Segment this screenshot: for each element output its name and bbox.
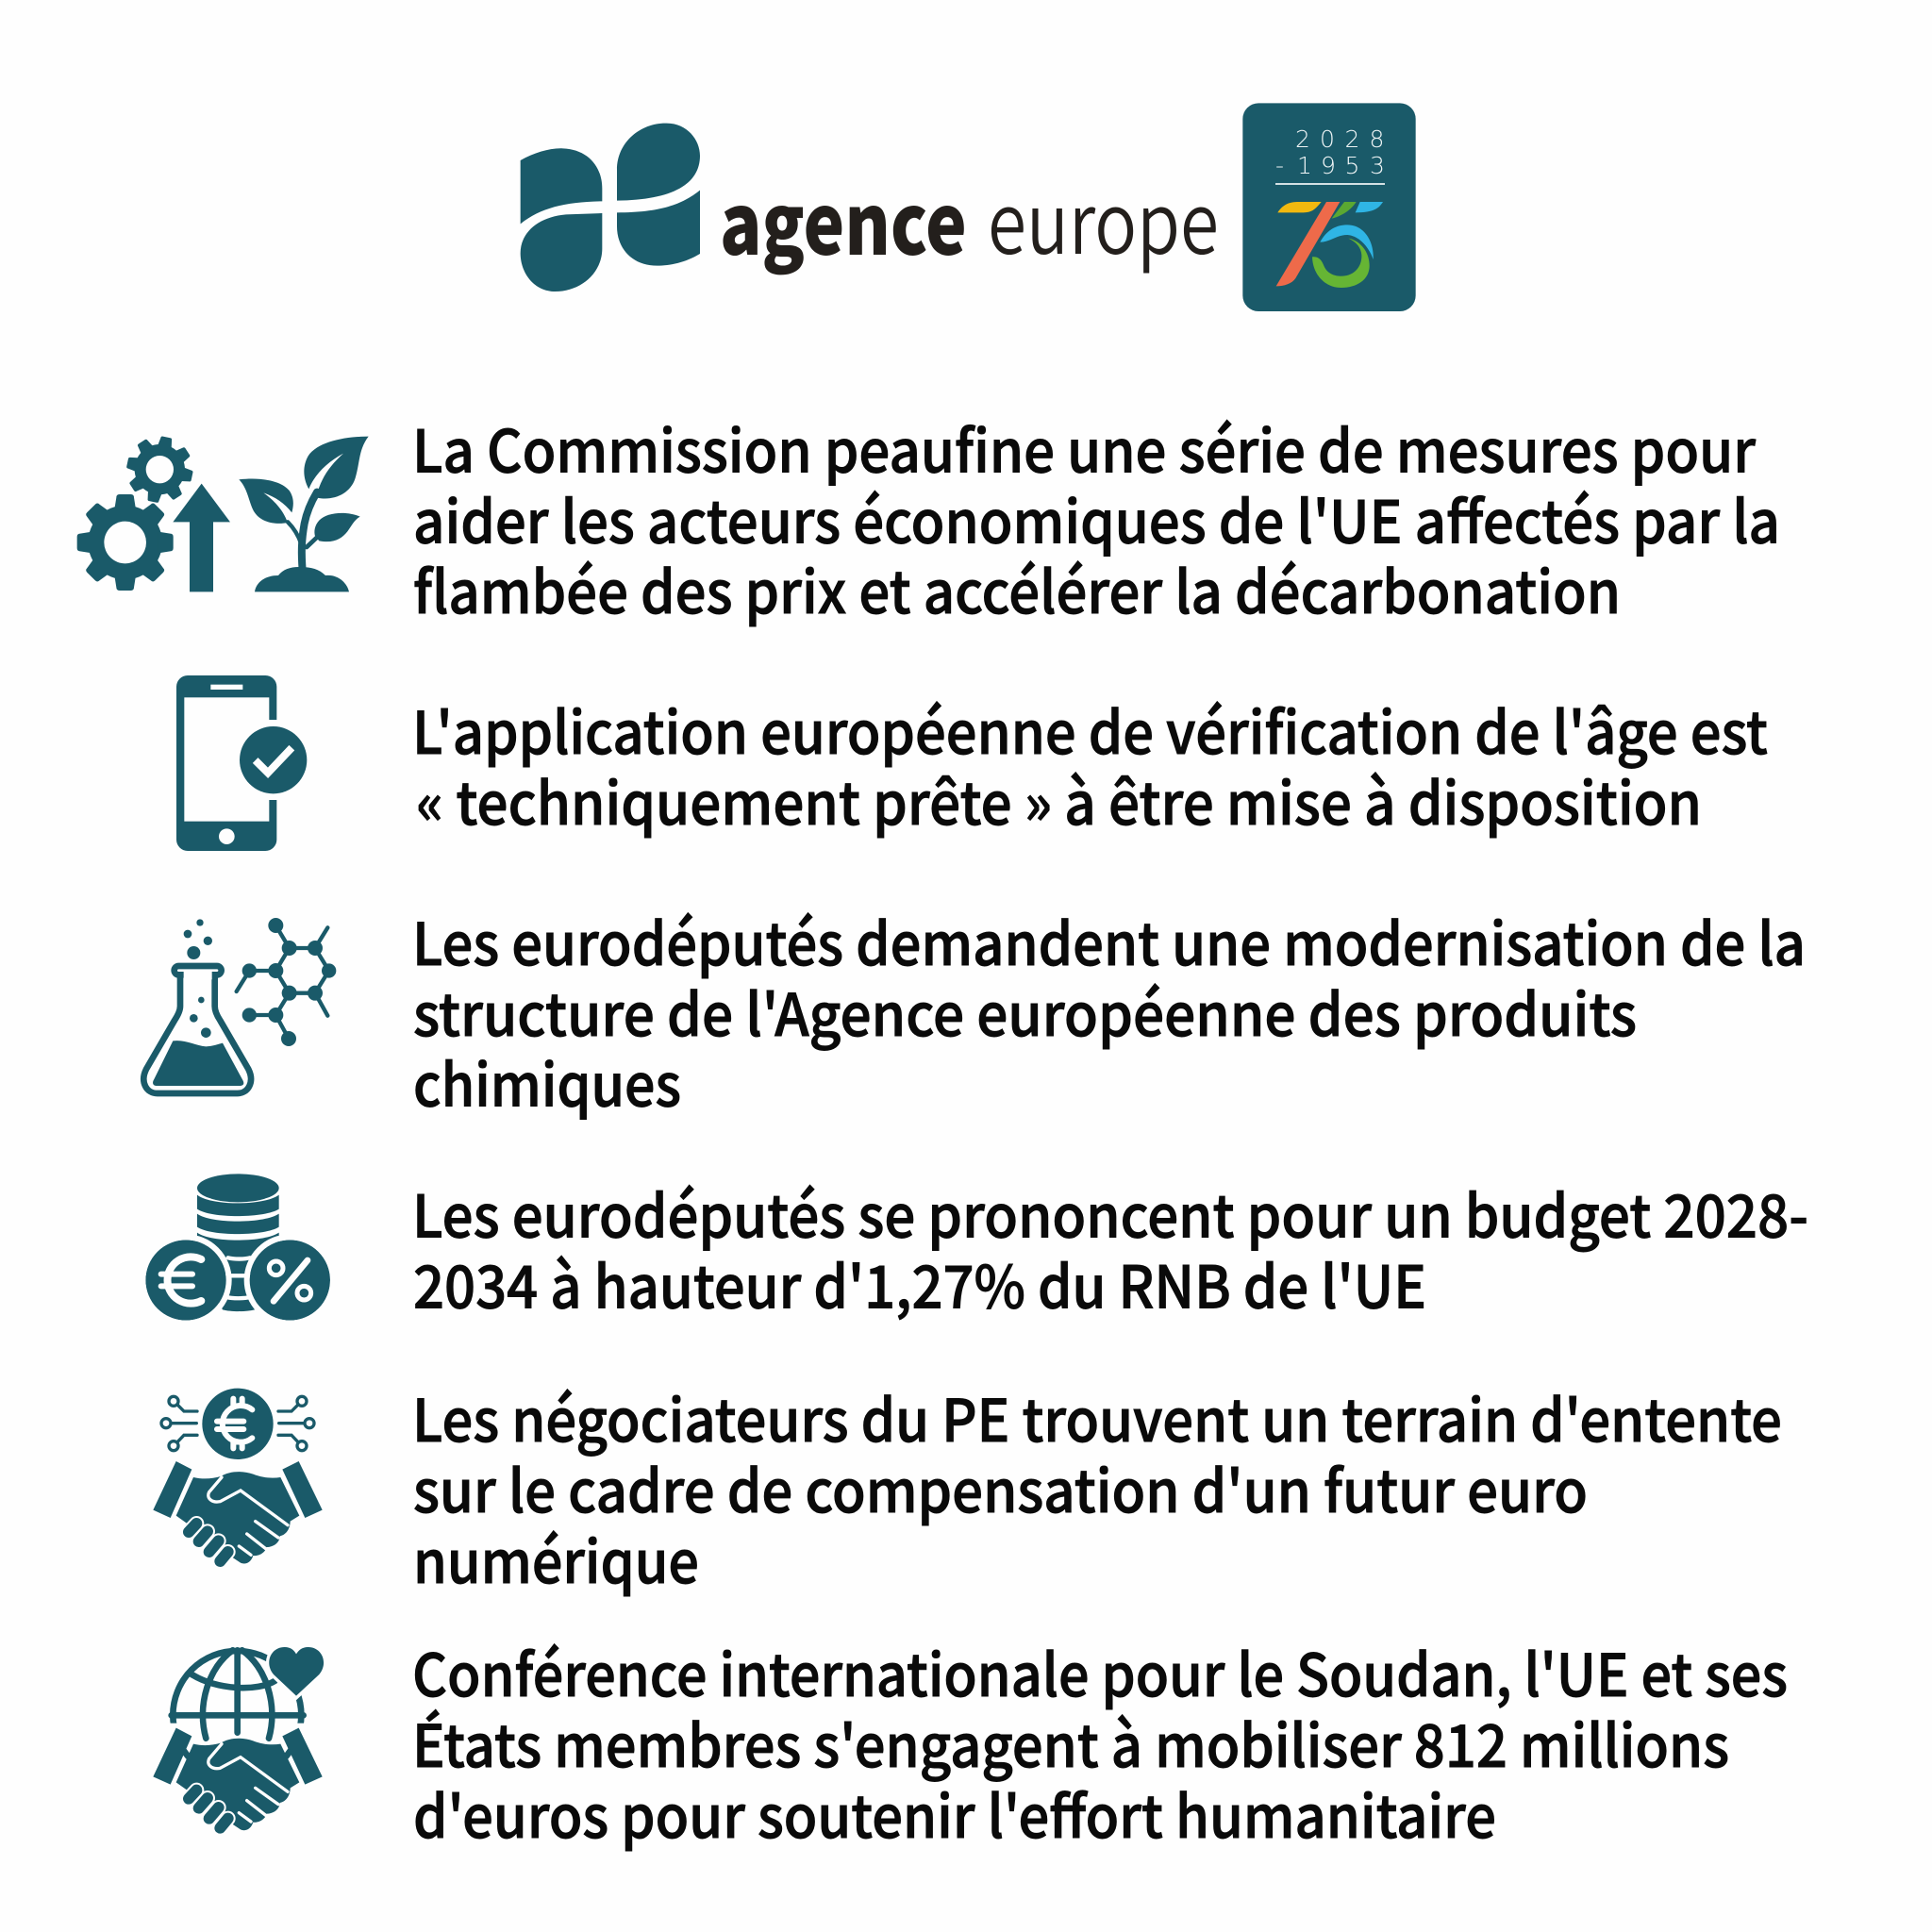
text [412, 1374, 1782, 1600]
badge: 75 years [1242, 103, 1416, 311]
icon: flask and molecule [143, 918, 336, 1093]
icon: digital euro coin and handshake [153, 1389, 323, 1564]
text [412, 404, 1780, 630]
item 2: age verification app [176, 675, 1768, 851]
item 6: Sudan conference [153, 1628, 1788, 1855]
wordmark: agence [720, 158, 967, 279]
icon: globe, heart and handshake [153, 1647, 324, 1830]
text: 2034 à hauteur d'1,27% du RNB de l'UE [413, 1240, 1426, 1324]
icon: agence europe symbol [521, 124, 700, 291]
icon: smartphone with check badge [176, 675, 307, 851]
text [412, 686, 1768, 841]
text: Les eurodéputés se prononcent pour un budget 2028- [412, 1170, 1808, 1255]
icon: coins, euro and percent [142, 1174, 333, 1324]
text: flambée des prix et accélérer la décarbonation [413, 545, 1621, 630]
text: numérique [413, 1515, 699, 1600]
text [412, 1170, 1808, 1324]
badge years [1275, 125, 1385, 179]
text: chimiques [413, 1038, 681, 1123]
text: sur le cadre de compensation d'un futur euro [413, 1444, 1588, 1529]
text [412, 897, 1806, 1123]
badge years: 2028 [1295, 125, 1384, 153]
text: L'application européenne de vérification de l'âge est [412, 686, 1768, 771]
item 4: EU budget [142, 1170, 1808, 1324]
wordmark [720, 157, 1219, 279]
text: États membres s'engagent à mobiliser 812 millions [412, 1699, 1729, 1784]
badge years: -1953 [1275, 152, 1385, 179]
text: Les eurodéputés demandent une modernisation de la [412, 897, 1806, 982]
text: La Commission peaufine une série de mesures pour [412, 404, 1757, 489]
header: agence europe logo [521, 103, 1416, 311]
wordmark: europe [988, 157, 1219, 278]
text: aider les acteurs économiques de l'UE affectés par la [413, 475, 1780, 560]
text: Les négociateurs du PE trouvent un terrain d'entente [412, 1374, 1782, 1458]
text: d'euros pour soutenir l'effort humanitaire [413, 1770, 1496, 1855]
item 1: decarbonisation measures [77, 404, 1780, 630]
icon: gears, arrow and plant [77, 436, 369, 591]
text: Conférence internationale pour le Soudan, l'UE et ses [412, 1628, 1788, 1713]
item 3: chemicals agency [143, 897, 1806, 1123]
text [412, 1628, 1788, 1855]
text: « techniquement prête » à être mise à disposition [416, 757, 1702, 841]
item 5: digital euro [153, 1374, 1782, 1600]
text: structure de l'Agence européenne des produits [413, 968, 1637, 1053]
